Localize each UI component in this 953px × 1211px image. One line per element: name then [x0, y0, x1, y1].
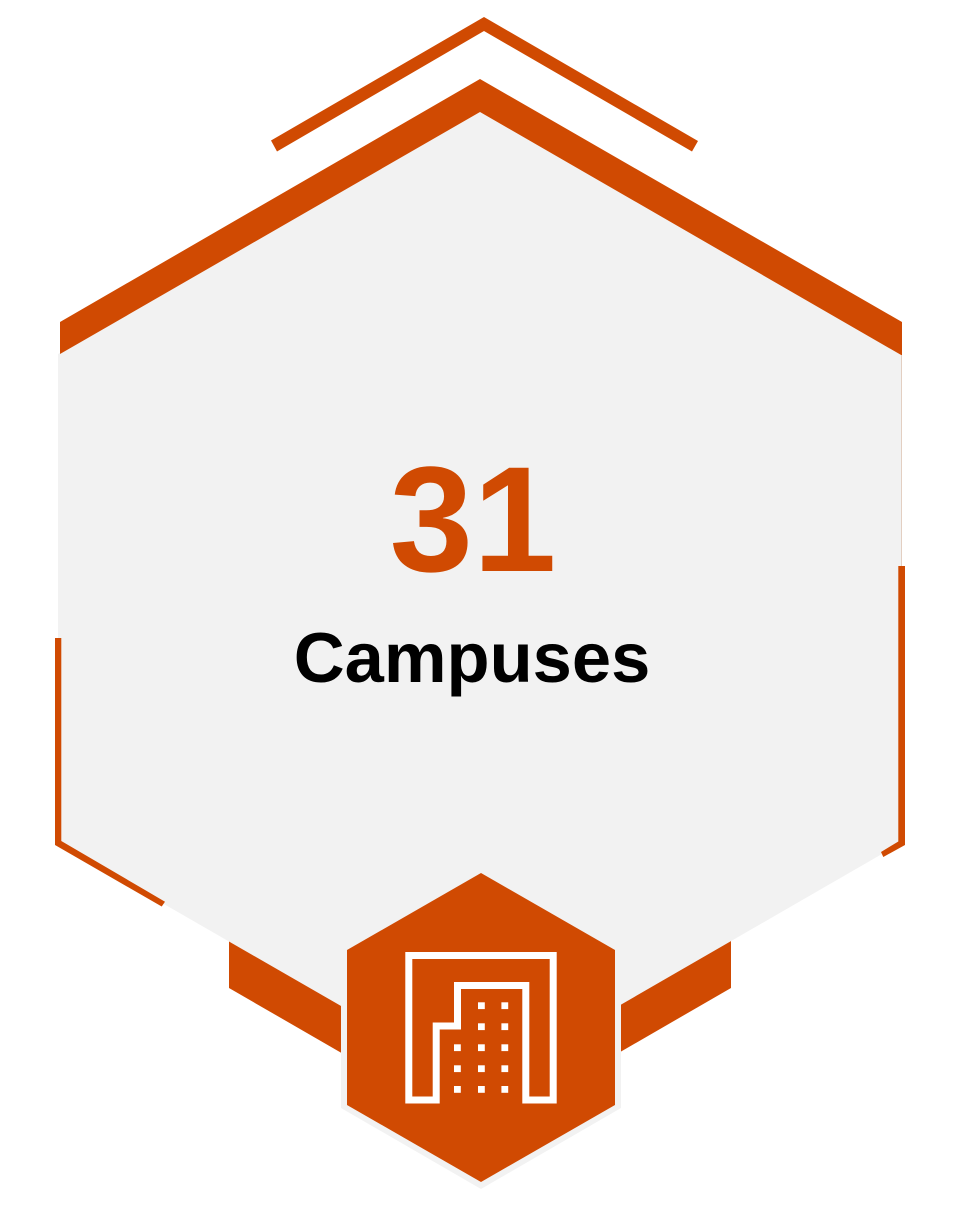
badge outer outline — [341, 866, 621, 1189]
lower back orange band — [229, 930, 731, 1133]
icon badge: building — [341, 866, 621, 1189]
top orange hexagon band — [60, 79, 902, 356]
statistic label: Campuses — [294, 618, 650, 697]
badge hexagon — [347, 873, 615, 1182]
left corner accent line — [55, 638, 165, 906]
right hairline edge — [901, 355, 902, 566]
statistic number: 31 — [390, 435, 556, 603]
icon: building windows — [454, 1002, 508, 1093]
right corner accent line — [881, 566, 905, 857]
main hexagon panel — [58, 112, 901, 1086]
icon: building outline — [409, 956, 553, 1100]
top chevron outline — [271, 17, 698, 152]
